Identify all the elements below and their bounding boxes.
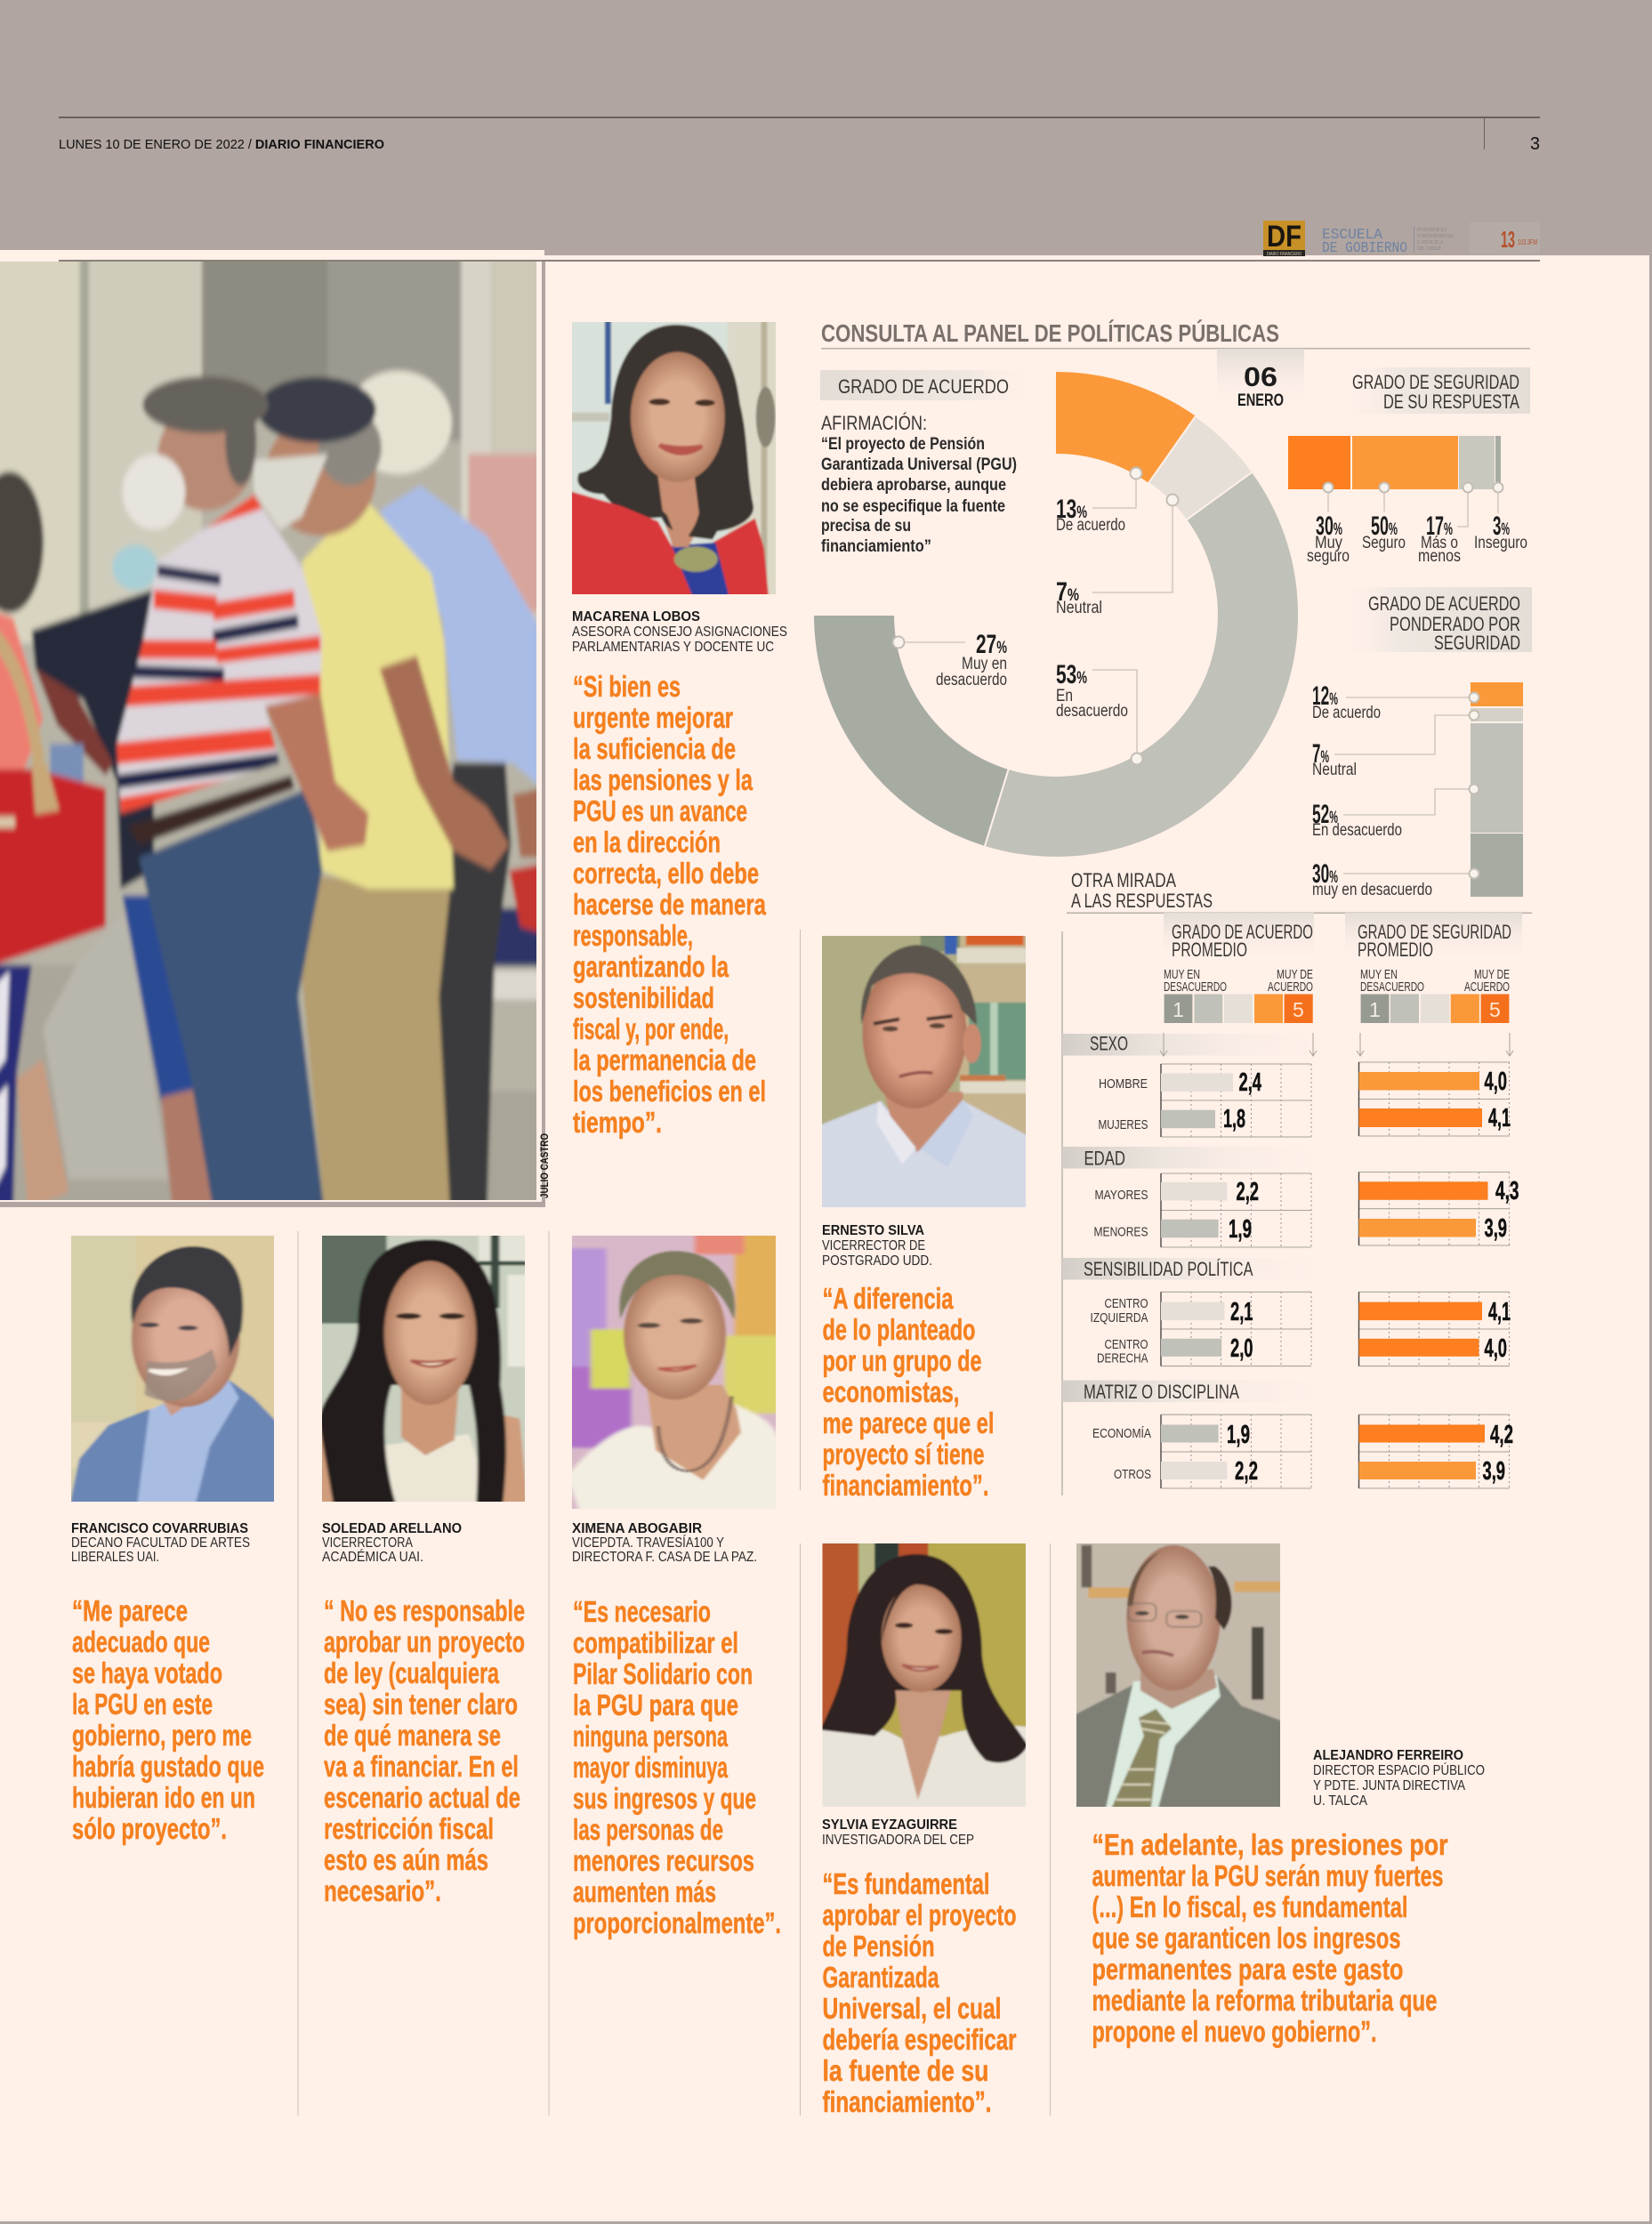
quote: Macarena Lobos: “Si bien es (573, 670, 681, 703)
row: mujeres: MUJERES (1098, 1117, 1148, 1132)
label: 12% de acuerdo: 12% (1312, 681, 1338, 711)
label: 17% más o menos: 17% (1426, 512, 1453, 541)
quote: Macarena Lobos (573, 670, 766, 1139)
table header: grado de acuerdo promedio: DESACUERDO (1164, 979, 1227, 995)
quote: Soledad Arellano: de qué manera se (324, 1719, 501, 1752)
row: hombre (1099, 1068, 1507, 1097)
panel: Ernesto Silva (800, 930, 1027, 1502)
quote: Soledad Arellano: restricción fiscal (324, 1812, 494, 1845)
quote: Ximena Abogabir: sus ingresos y que (573, 1782, 756, 1815)
label: 30% muy seguro: 30% (1316, 512, 1342, 541)
row: hombre: HOMBRE (1099, 1076, 1148, 1092)
callout: 7% neutral: Neutral (1056, 599, 1102, 617)
row: menores: 3,9 (1484, 1214, 1507, 1243)
callout: 53% en desacuerdo: desacuerdo (1056, 702, 1128, 721)
quote: Sylvia Eyzaguirre: de Pensión (822, 1930, 934, 1962)
scale 1 to 5: 1 (1369, 998, 1381, 1021)
label: 50% seguro: 50% (1371, 512, 1398, 541)
table header: grado de seguridad promedio: MUY DE (1474, 967, 1510, 982)
page header: LUNES 10 DE ENERO DE 2022 / DIARIO FINANCIERO (59, 137, 384, 152)
statement text (821, 412, 1017, 556)
quote: Ximena Abogabir: aumenten más (573, 1875, 716, 1908)
quote: Sylvia Eyzaguirre: la fuente de su (822, 2054, 989, 2087)
quote: Francisco Covarrubias: se haya votado (72, 1656, 222, 1689)
row: economia: 1,9 (1227, 1421, 1250, 1449)
callout: 7% neutral: 7% (1056, 577, 1079, 607)
statement text: “El proyecto de Pensión (821, 435, 985, 454)
name: Macarena Lobos: ASESORA CONSEJO ASIGNACIONES (572, 624, 787, 640)
quote: Ernesto Silva: proyecto sí tiene (822, 1438, 984, 1471)
label: 7% neutral: 7% (1312, 739, 1329, 769)
quote: Ximena Abogabir (573, 1595, 781, 1939)
quote: Soledad Arellano: sea) sin tener claro (324, 1688, 518, 1720)
row: mujeres: 1,8 (1223, 1105, 1245, 1133)
segment: neutral 7% (1148, 416, 1253, 520)
row: otros: 3,9 (1482, 1457, 1505, 1486)
row: centro izquierda: 4,1 (1488, 1298, 1511, 1326)
quote: Soledad Arellano: va a financiar. En el (324, 1750, 519, 1783)
callout: 27% muy en desacuerdo: 27% (976, 630, 1007, 659)
name: Ernesto Silva: VICERRECTOR DE (822, 1238, 925, 1253)
quote: Francisco Covarrubias: sólo proyecto”. (72, 1812, 227, 1845)
table header: grado de seguridad promedio: PROMEDIO (1358, 939, 1433, 961)
table header: grado de seguridad promedio: DESACUERDO (1360, 979, 1424, 995)
page header: 3 (1530, 134, 1540, 154)
quote: Alejandro Ferreiro: propone el nuevo gobierno”. (1092, 2015, 1377, 2048)
statement text: financiamiento” (821, 537, 931, 556)
quote: Francisco Covarrubias: hubieran ido en un (72, 1781, 255, 1814)
name: Sylvia Eyzaguirre (822, 1817, 974, 1848)
quote: Macarena Lobos: fiscal y, por ende, (573, 1012, 729, 1045)
row: centro derecha: DERECHA (1097, 1350, 1148, 1366)
row: mayores: 4,3 (1495, 1177, 1519, 1205)
quote: Soledad Arellano: escenario actual de (324, 1781, 520, 1814)
sponsor logos (1263, 220, 1540, 257)
name: Ximena Abogabir: VICEPDTA. TRAVESÍA100 Y (572, 1534, 724, 1551)
name: Ximena Abogabir: DIRECTORA F. CASA DE LA PAZ. (572, 1550, 757, 1565)
quote: Ximena Abogabir: las personas de (573, 1813, 723, 1846)
row: economia: 4,2 (1490, 1421, 1513, 1449)
quote: Ximena Abogabir: “Es necesario (573, 1595, 711, 1628)
label: 30% muy seguro: seguro (1307, 547, 1350, 566)
quote: Ximena Abogabir: menores recursos (573, 1844, 754, 1877)
section: matriz o disciplina (1062, 1381, 1513, 1488)
row: centro derecha: CENTRO (1105, 1337, 1148, 1352)
main photo: people queuing with masks (0, 252, 551, 1210)
section: sexo (1062, 1032, 1513, 1137)
row: mujeres (1098, 1104, 1511, 1133)
name: Ernesto Silva: POSTGRADO UDD. (822, 1253, 932, 1269)
quote: Macarena Lobos: PGU es un avance (573, 794, 747, 827)
quote: Ximena Abogabir: proporcionalmente”. (573, 1906, 781, 1939)
portrait: Ximena Abogabir (572, 1236, 776, 1509)
sponsor logos: DF (1267, 220, 1301, 254)
portrait: Macarena Lobos (572, 322, 776, 594)
quote: Ximena Abogabir: ninguna persona (573, 1720, 728, 1753)
panel: Macarena Lobos (570, 319, 787, 1139)
name: Alejandro Ferreiro: ALEJANDRO FERREIRO (1313, 1748, 1463, 1763)
callout: 7% neutral (1056, 495, 1178, 617)
table header: grado de acuerdo promedio: PROMEDIO (1172, 939, 1247, 961)
section: matriz o disciplina: MATRIZ O DISCIPLINA (1084, 1381, 1239, 1403)
label: 50% seguro (1362, 512, 1406, 552)
name: Sylvia Eyzaguirre: INVESTIGADORA DEL CEP (822, 1833, 974, 1848)
heading: otra mirada (1071, 869, 1213, 912)
heading: grado de acuerdo ponderado: GRADO DE ACUERDO (1368, 592, 1520, 615)
sponsor logos: UNIVERSIDAD (1417, 234, 1455, 239)
table header: grado de acuerdo promedio: MUY EN (1164, 967, 1200, 982)
row: centro izquierda: 2,1 (1230, 1298, 1253, 1326)
quote: Sylvia Eyzaguirre: financiamiento”. (822, 2085, 991, 2118)
row: mujeres: 4,1 (1488, 1104, 1511, 1132)
quote: Macarena Lobos: tiempo”. (573, 1106, 662, 1139)
section: edad: EDAD (1084, 1148, 1125, 1169)
statement text: no se especifique la fuente (821, 497, 1005, 516)
heading: otra mirada: A LAS RESPUESTAS (1071, 890, 1213, 912)
stacked column: acuerdo ponderado (1312, 681, 1523, 899)
row: centro izquierda: CENTRO (1105, 1296, 1148, 1311)
label: 50% seguro: Seguro (1362, 534, 1406, 552)
quote: Alejandro Ferreiro (1092, 1828, 1448, 2048)
quote: Ernesto Silva: de lo planteado (822, 1313, 975, 1346)
label: 30% muy en desacuerdo: muy en desacuerdo (1312, 881, 1432, 899)
label: 30% muy en desacuerdo: 30% (1312, 859, 1338, 889)
quote: Macarena Lobos: los beneficios en el (573, 1075, 766, 1108)
panel title: CONSULTA AL PANEL DE POLÍTICAS PÚBLICAS (821, 319, 1279, 347)
sponsor logos: PONTIFICIA (1417, 228, 1447, 233)
panel: Soledad Arellano (319, 1232, 528, 1907)
label: 3% inseguro: Inseguro (1474, 534, 1527, 552)
label: 3% inseguro (1474, 512, 1527, 552)
label: 52% en desacuerdo: En desacuerdo (1312, 821, 1402, 840)
portrait: Soledad Arellano (322, 1236, 525, 1502)
date box: ENERO (1237, 391, 1284, 410)
quote: Ximena Abogabir: la PGU para que (573, 1688, 738, 1721)
callout: 53% en desacuerdo: 53% (1056, 660, 1087, 689)
quote: Sylvia Eyzaguirre: aprobar el proyecto (822, 1898, 1016, 1931)
row: mayores: MAYORES (1094, 1188, 1148, 1203)
quote: Alejandro Ferreiro: mediante la reforma tributaria que (1092, 1984, 1438, 2017)
label: 12% de acuerdo: De acuerdo (1312, 704, 1381, 722)
section: sensibilidad politica (1062, 1258, 1511, 1366)
quote: Ernesto Silva: economistas, (822, 1375, 959, 1408)
row: mayores: 2,2 (1237, 1178, 1259, 1206)
scale 1 to 5 (1361, 995, 1509, 1023)
label: 52% en desacuerdo (1312, 800, 1402, 840)
name: Macarena Lobos: PARLAMENTARIAS Y DOCENTE UC (572, 640, 774, 655)
table header: grado de seguridad promedio: ACUERDO (1464, 979, 1510, 995)
callout: 27% muy en desacuerdo: Muy en (962, 655, 1007, 673)
callout: 27% muy en desacuerdo (893, 630, 1007, 689)
sponsor logos: DE GOBIERNO (1322, 240, 1407, 257)
name: Francisco Covarrubias: LIBERALES UAI. (71, 1550, 159, 1565)
label: 30% muy seguro (1307, 512, 1350, 566)
panel: Ximena Abogabir (567, 1229, 781, 1939)
row: menores: 1,9 (1229, 1215, 1252, 1244)
label: 30% muy en desacuerdo (1312, 859, 1432, 899)
quote: Soledad Arellano (324, 1594, 525, 1907)
scale 1 to 5: 5 (1293, 998, 1304, 1021)
heading: grado de acuerdo: GRADO DE ACUERDO (838, 375, 1009, 398)
callout: 27% muy en desacuerdo: desacuerdo (936, 671, 1007, 689)
statement text: precisa de su (821, 517, 911, 536)
name: Francisco Covarrubias: DECANO FACULTAD DE ARTES (71, 1535, 250, 1551)
segment: muy en desacuerdo 27% (813, 615, 1009, 847)
row: hombre: 4,0 (1484, 1068, 1507, 1096)
quote: Macarena Lobos: correcta, ello debe (573, 857, 759, 890)
section: edad (1062, 1147, 1519, 1247)
label: 3% inseguro: 3% (1493, 512, 1510, 541)
stacked bar: grado de seguridad (1288, 436, 1527, 566)
row: economia: ECONOMÍA (1092, 1426, 1151, 1441)
statement text: AFIRMACIÓN: (821, 412, 927, 434)
section: sexo: SEXO (1090, 1032, 1128, 1055)
quote: Alejandro Ferreiro: permanentes para este gasto (1092, 1953, 1404, 1986)
donut chart: grado de acuerdo (813, 372, 1299, 858)
sponsor logos: 103.3FM (1518, 238, 1537, 246)
quote: Macarena Lobos: urgente mejorar (573, 701, 733, 734)
sponsor logos: DE CHILE (1417, 246, 1441, 252)
quote: Macarena Lobos: en la dirección (573, 826, 721, 858)
quote: Soledad Arellano: necesario”. (324, 1874, 441, 1907)
panel: Sylvia Eyzaguirre (820, 1541, 1027, 2118)
segment: de acuerdo 13% (1056, 372, 1196, 483)
quote: Macarena Lobos: la suficiencia de (573, 732, 736, 765)
heading: grado de seguridad (1340, 367, 1530, 414)
row: hombre: 2,4 (1238, 1068, 1261, 1097)
label: 17% más o menos: Más o (1421, 534, 1458, 552)
quote: Francisco Covarrubias: gobierno, pero me (72, 1719, 252, 1752)
row: centro derecha (1097, 1334, 1507, 1366)
name: Macarena Lobos: MACARENA LOBOS (572, 609, 700, 624)
quote: Macarena Lobos: hacerse de manera (573, 888, 766, 921)
quote: Alejandro Ferreiro: aumentar la PGU serán muy fuertes (1092, 1859, 1443, 1892)
callout: 13% de acuerdo (1056, 468, 1142, 535)
name: Francisco Covarrubias: FRANCISCO COVARRUBIAS (71, 1521, 248, 1536)
name: Ernesto Silva (822, 1223, 932, 1269)
quote: Macarena Lobos: responsable, (573, 919, 693, 952)
name: Alejandro Ferreiro: DIRECTOR ESPACIO PÚBLICO (1313, 1761, 1485, 1778)
date box: 06 (1244, 361, 1277, 392)
table header: grado de seguridad promedio: MUY EN (1360, 967, 1398, 982)
label: 17% más o menos: menos (1418, 547, 1461, 566)
name: Francisco Covarrubias (71, 1521, 250, 1565)
callout: 53% en desacuerdo: En (1056, 687, 1073, 705)
label: 12% de acuerdo (1312, 681, 1381, 722)
quote: Francisco Covarrubias: adecuado que (72, 1625, 210, 1658)
heading: grado de seguridad: DE SU RESPUESTA (1383, 391, 1519, 413)
quote: Ernesto Silva: “A diferencia (822, 1282, 954, 1315)
quote: Francisco Covarrubias (72, 1594, 264, 1845)
panel: Francisco Covarrubias (68, 1232, 277, 1845)
main photo: people queuing with masks: JULIO CASTRO (538, 1133, 551, 1198)
sponsor logos: ESCUELA (1322, 227, 1383, 244)
quote: Soledad Arellano: aprobar un proyecto (324, 1625, 525, 1658)
row: menores (1094, 1214, 1507, 1244)
quote: Ernesto Silva: me parece que el (822, 1406, 995, 1439)
name: Soledad Arellano: ACADÉMICA UAI. (322, 1548, 423, 1565)
segment: en desacuerdo 53% (985, 471, 1299, 858)
quote: Sylvia Eyzaguirre: debería especificar (822, 2023, 1017, 2056)
quote: Francisco Covarrubias: “Me parece (72, 1594, 188, 1627)
quote: Sylvia Eyzaguirre: Garantizada (822, 1961, 939, 1994)
name: Soledad Arellano (322, 1521, 462, 1565)
sponsor logos: CATÓLICA (1417, 238, 1444, 246)
label: 52% en desacuerdo: 52% (1312, 800, 1338, 829)
table header: grado de acuerdo promedio: MUY DE (1277, 967, 1313, 982)
quote: Alejandro Ferreiro: (...) En lo fiscal, es fundamental (1092, 1890, 1407, 1923)
label: 30% muy seguro: Muy (1315, 534, 1342, 552)
quote: Ximena Abogabir: Pilar Solidario con (573, 1657, 753, 1690)
panel: Alejandro Ferreiro (1075, 1541, 1485, 2048)
quote: Soledad Arellano: “ No es responsable (324, 1594, 525, 1627)
scale 1 to 5 (1164, 995, 1313, 1023)
quote: Francisco Covarrubias: la PGU en este (72, 1688, 213, 1720)
quote: Soledad Arellano: de ley (cualquiera (324, 1656, 499, 1689)
label: 7% neutral (1312, 739, 1357, 779)
heading: grado de acuerdo (820, 370, 1032, 400)
section: sensibilidad politica: SENSIBILIDAD POLÍTICA (1084, 1258, 1253, 1280)
quote: Francisco Covarrubias: habría gustado que (72, 1750, 264, 1783)
scale 1 to 5: 1 (1173, 998, 1184, 1021)
name: Alejandro Ferreiro: U. TALCA (1313, 1793, 1367, 1809)
statement text: debiera aprobarse, aunque (821, 476, 1006, 495)
row: otros: OTROS (1114, 1467, 1151, 1482)
heading: grado de acuerdo ponderado: PONDERADO POR (1390, 613, 1520, 635)
table header: grado de acuerdo promedio: GRADO DE ACUERDO (1172, 921, 1313, 943)
row: otros (1114, 1457, 1505, 1486)
quote: Ernesto Silva: por un grupo de (822, 1344, 982, 1377)
table header: grado de acuerdo promedio (1164, 913, 1314, 1023)
name: Sylvia Eyzaguirre: SYLVIA EYZAGUIRRE (822, 1817, 957, 1833)
label: 17% más o menos (1418, 512, 1461, 566)
row: otros: 2,2 (1235, 1457, 1258, 1486)
row: menores: MENORES (1094, 1224, 1148, 1240)
page header (59, 117, 1540, 154)
heading: grado de seguridad: GRADO DE SEGURIDAD (1352, 371, 1519, 393)
sponsor logos: 13 (1501, 226, 1515, 253)
name: Alejandro Ferreiro (1313, 1748, 1485, 1809)
quote: Macarena Lobos: garantizando la (573, 950, 729, 983)
row: mayores (1094, 1177, 1519, 1206)
table header: grado de seguridad promedio (1345, 913, 1522, 1023)
row: centro derecha: 4,0 (1484, 1334, 1507, 1363)
name: Alejandro Ferreiro: Y PDTE. JUNTA DIRECTIVA (1313, 1778, 1465, 1793)
label: 7% neutral: Neutral (1312, 761, 1357, 779)
sponsor logos: DIARIO FINANCIERO (1267, 252, 1301, 257)
quote: Macarena Lobos: las pensiones y la (573, 763, 753, 796)
quote: Soledad Arellano: esto es aún más (324, 1843, 488, 1876)
quote: Alejandro Ferreiro: que se garanticen los ingresos (1092, 1922, 1400, 1954)
portrait: Francisco Covarrubias (71, 1236, 274, 1502)
quote: Ximena Abogabir: compatibilizar el (573, 1626, 738, 1659)
portrait: Ernesto Silva (822, 936, 1026, 1207)
heading: grado de acuerdo ponderado (1340, 587, 1532, 654)
quote: Macarena Lobos: la permanencia de (573, 1044, 756, 1076)
row: centro derecha: 2,0 (1230, 1334, 1253, 1363)
name: Soledad Arellano: VICERRECTORA (322, 1535, 413, 1551)
portrait: Sylvia Eyzaguirre (822, 1543, 1026, 1807)
date box (1217, 349, 1304, 410)
name: Ximena Abogabir: XIMENA ABOGABIR (572, 1521, 702, 1536)
table header: grado de seguridad promedio: GRADO DE SEGURIDAD (1358, 921, 1511, 943)
quote: Ernesto Silva: financiamiento”. (822, 1469, 989, 1502)
callout: 13% de acuerdo: 13% (1056, 495, 1087, 524)
quote: Ernesto Silva (822, 1282, 995, 1502)
quote: Macarena Lobos: sostenibilidad (573, 981, 714, 1014)
name: Macarena Lobos (572, 609, 787, 655)
quote: Sylvia Eyzaguirre (822, 1867, 1017, 2118)
name: Ximena Abogabir (572, 1521, 757, 1565)
statement text: Garantizada Universal (PGU) (821, 455, 1017, 474)
heading: otra mirada: OTRA MIRADA (1071, 869, 1176, 891)
quote: Alejandro Ferreiro: “En adelante, las presiones por (1092, 1828, 1448, 1861)
quote: Sylvia Eyzaguirre: Universal, el cual (822, 1992, 1002, 2025)
row: centro izquierda (1091, 1296, 1511, 1326)
callout: 53% en desacuerdo (1056, 660, 1142, 765)
scale 1 to 5: 5 (1489, 998, 1501, 1021)
heading: grado de acuerdo ponderado: SEGURIDAD (1434, 632, 1520, 654)
quote: Sylvia Eyzaguirre: “Es fundamental (822, 1867, 989, 1900)
name: Ernesto Silva: ERNESTO SILVA (822, 1223, 924, 1238)
row: centro izquierda: IZQUIERDA (1091, 1310, 1148, 1326)
table header: grado de acuerdo promedio: ACUERDO (1268, 979, 1313, 995)
callout: 13% de acuerdo: De acuerdo (1056, 516, 1125, 535)
row: economia (1092, 1421, 1513, 1449)
portrait: Alejandro Ferreiro (1076, 1543, 1280, 1807)
name: Soledad Arellano: SOLEDAD ARELLANO (322, 1521, 462, 1536)
quote: Ximena Abogabir: mayor disminuya (573, 1751, 728, 1784)
